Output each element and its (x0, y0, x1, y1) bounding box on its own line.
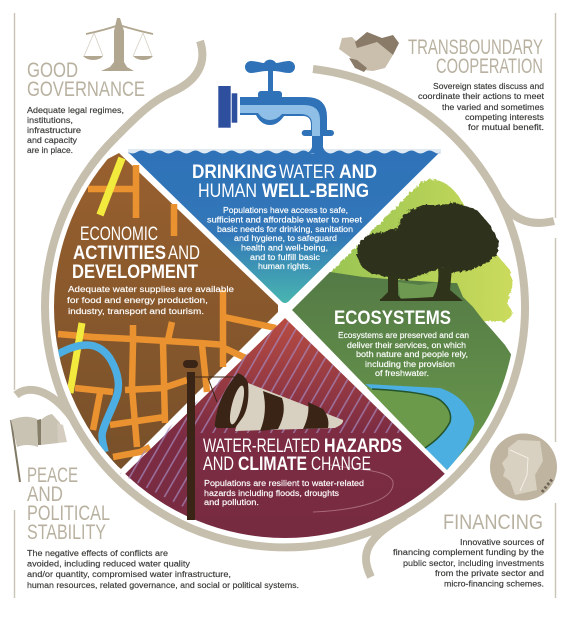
body text: Ecosystems are preserved and can (338, 331, 469, 340)
panel: transboundary cooperation (339, 32, 545, 132)
body text: infrastructure (27, 126, 82, 135)
body text: sufficient and affordable water to meet (207, 216, 363, 224)
spout flange (302, 130, 334, 136)
panel: peace and political stability (11, 414, 299, 590)
heading: HAZARDS (324, 436, 402, 457)
body text: from the private sector and (435, 569, 544, 578)
tree (357, 202, 498, 301)
panel: water-related hazards and climate change (120, 318, 445, 538)
heading: STABILITY (27, 521, 106, 544)
body text: Populations have access to safe, (223, 206, 348, 215)
heading: GOVERNANCE (27, 78, 145, 101)
heading: CLIMATE (238, 454, 307, 475)
heading (27, 464, 110, 544)
body text: both nature and people rely, (356, 350, 468, 359)
body text (204, 479, 364, 507)
icon: handshake (339, 32, 399, 72)
panel: ecosystems (292, 179, 516, 470)
maroon sector (125, 318, 445, 538)
body text: and/or quantity, compromised water infrastructure, (27, 570, 231, 579)
inner meadow (367, 388, 452, 448)
body text: human rights. (258, 262, 311, 271)
heading: WELL-BEING (262, 181, 369, 202)
pipe outer (240, 97, 327, 132)
body text: Adequate legal regimes, (27, 106, 124, 115)
body text: public sector, including investments (403, 559, 544, 568)
heading: ACTIVITIES (73, 243, 166, 264)
icon: water tap (218, 60, 334, 153)
spout (307, 136, 328, 153)
icon: flag (11, 414, 67, 482)
body text: financing complement funding by the (393, 548, 545, 557)
body text: basic needs for drinking, sanitation (217, 225, 353, 234)
body text (27, 106, 124, 155)
body text (207, 206, 363, 271)
heading (72, 224, 200, 283)
body text (418, 82, 545, 132)
body text: competing interests (465, 113, 544, 122)
heading: ECOSYSTEMS (334, 308, 451, 329)
body text: deliver their services, on which (347, 341, 466, 350)
body text: avoided, including reduced water quality (27, 560, 190, 568)
hatch lines (120, 321, 400, 507)
body text: institutions, (27, 116, 73, 125)
heading (203, 436, 402, 475)
body text: hazards including floods, droughts (204, 489, 339, 498)
heading: WATER-RELATED (203, 436, 320, 457)
heading: ECONOMIC (80, 224, 158, 245)
heading: POLITICAL (27, 502, 110, 525)
heading: AND (203, 454, 234, 475)
icon: coin (490, 434, 557, 500)
panel: good governance (27, 18, 153, 155)
spiral lines (313, 465, 393, 512)
body text: health and well-being, (241, 244, 328, 252)
body text: and capacity (27, 136, 77, 145)
body text: micro-financing schemes. (444, 580, 544, 588)
river (365, 384, 474, 470)
body text: for mutual benefit. (468, 123, 544, 132)
body text: and hygiene, to safeguard (234, 234, 337, 243)
heading: AND (168, 243, 200, 264)
panel: financing (393, 434, 557, 588)
heading: CHANGE (311, 454, 371, 475)
body text: industry, transport and tourism. (68, 307, 204, 316)
windsock icon (183, 360, 343, 520)
icon: scales (83, 18, 153, 71)
body text: for food and energy production, (67, 296, 208, 305)
heading: AND (339, 162, 377, 183)
body text: are in place. (27, 146, 73, 155)
heading: WATER (279, 162, 335, 183)
heading: GOOD (27, 59, 78, 82)
body text (67, 285, 235, 316)
heading: PEACE (27, 464, 78, 487)
body text: The negative effects of conflicts are (27, 549, 169, 558)
body text: coordinate their actions to meet (418, 92, 545, 101)
body text: including the provision (365, 360, 455, 369)
heading: HUMAN (198, 181, 257, 202)
body text: the varied and sometimes (442, 103, 544, 112)
heading (408, 36, 543, 78)
road network (52, 158, 276, 457)
heading (27, 59, 145, 101)
heading (192, 162, 377, 202)
body text: Sovereign states discuss and (433, 82, 544, 91)
heading: DEVELOPMENT (72, 262, 198, 283)
light foliage (325, 179, 513, 322)
handle (245, 60, 295, 73)
body text (393, 538, 545, 588)
body text: Adequate water supplies are available (68, 285, 235, 294)
body text: of freshwater. (375, 369, 429, 378)
panel: economic activities and development (30, 153, 278, 469)
heading: FINANCING (443, 511, 543, 534)
body text: Innovative sources of (460, 538, 545, 547)
heading: DRINKING (192, 162, 277, 183)
blue triangle (128, 150, 440, 303)
body text: Populations are resilient to water-related (204, 479, 364, 488)
body text: and to fulfill basic (250, 253, 320, 262)
flanges (218, 86, 231, 128)
green sector (292, 272, 516, 470)
heading: AND (27, 483, 63, 506)
body text: and pollution. (204, 498, 259, 507)
brown sector (30, 153, 278, 469)
water surface band (128, 149, 441, 154)
body text: human resources, related governance, and social or political systems. (27, 581, 299, 590)
panel: drinking water and human well-being (128, 149, 441, 303)
body text (338, 331, 469, 378)
pipe inner (240, 105, 320, 136)
small bush between trunks (398, 282, 438, 298)
body text (27, 549, 299, 590)
